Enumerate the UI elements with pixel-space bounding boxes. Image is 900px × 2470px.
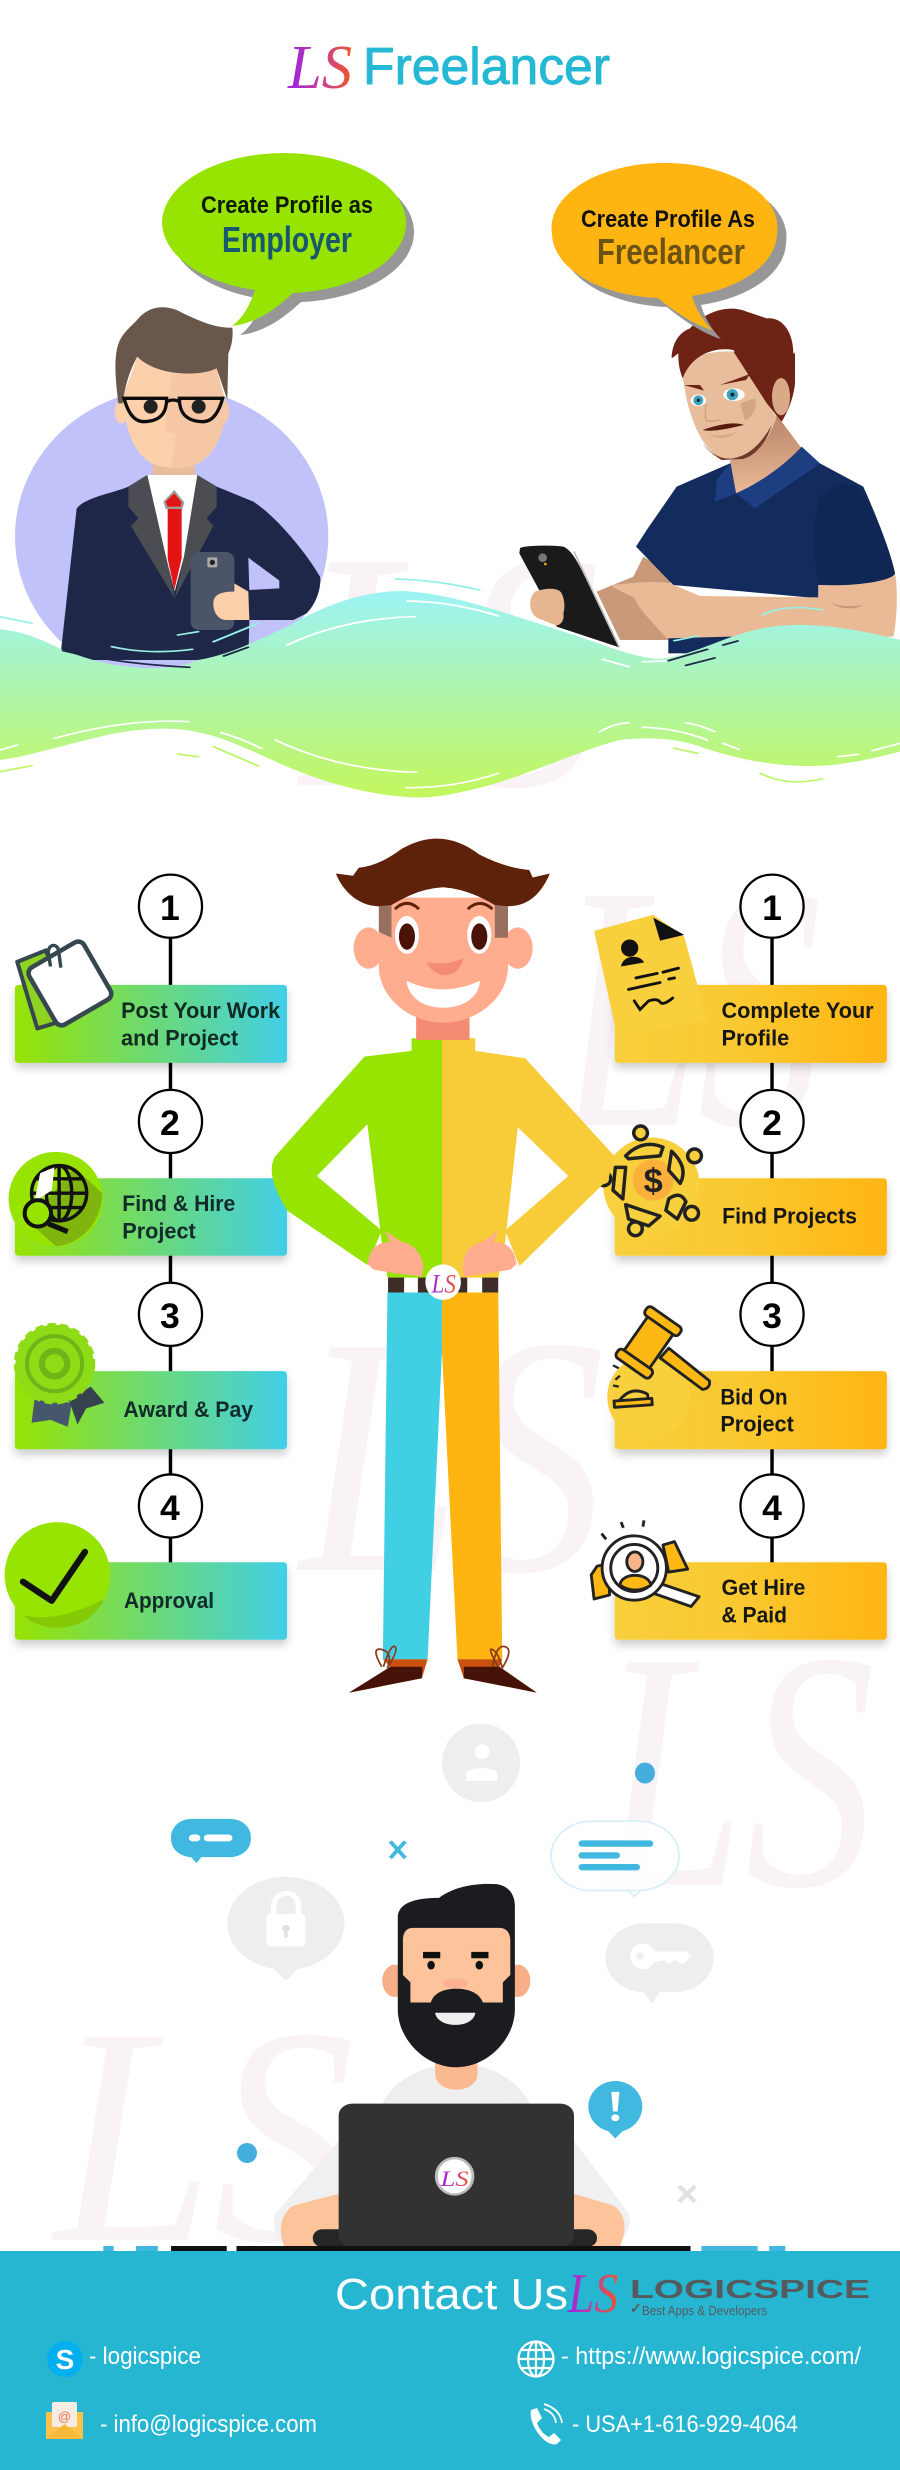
panel: employer step 1: and Project [121,1026,238,1051]
watermark: LS behind wave: LS [296,482,600,859]
speech bubble: employer: Employer [222,219,352,260]
speech bubble: freelancer: Create Profile As [581,206,755,233]
speech bubble: employer: Create Profile as [201,192,373,219]
panel: freelancer step 4: Get Hire [722,1575,805,1600]
panel: employer step 3: 3 [160,1296,180,1336]
wave divider [0,579,900,797]
panel: freelancer step 3: Project [720,1411,794,1436]
panel: freelancer step 1: 1 [762,888,782,928]
panel: freelancer step 4 [591,1474,887,1640]
timeline: employer steps line [169,906,172,1563]
speech bubble: employer [162,153,414,335]
icon: blue dot [635,1762,655,1784]
icon: phone [531,2404,562,2444]
panel: freelancer step 3: Bid On [720,1384,788,1409]
panel: contact footer [0,2251,900,2470]
panel: freelancer step 3: 3 [762,1296,782,1336]
contact: website: - https://www.logicspice.com/ [561,2343,861,2370]
panel: employer step 4: 4 [160,1488,180,1528]
title: LS Freelancer logo: Freelancer [363,38,610,96]
panel: employer step 4 [5,1474,287,1640]
illustration: freelancer man with tablet [519,309,897,653]
logo: Logicspice wordmark: LOGICSPICE [630,2274,870,2304]
illustration: bearded man at laptop [274,1884,630,2247]
speech bubble: freelancer: Freelancer [597,231,745,272]
icon: blue cross [390,1841,405,1858]
title: LS Freelancer logo: LS [287,34,352,102]
logo: Logicspice wordmark: ✓ [630,2300,642,2316]
panel: employer step 2 [9,1090,287,1256]
panel: employer step 1 [15,875,287,1063]
icon: skype: S [56,2344,74,2375]
timeline: freelancer steps line [770,906,774,1563]
logo: Logicspice wordmark [630,2274,870,2318]
desk line segments [103,2246,785,2252]
icon: skype [47,2341,83,2377]
icon: grey lock bubble [227,1877,344,1981]
panel: freelancer step 2: $ [644,1163,663,1201]
icon: mail envelope: @ [58,2409,71,2424]
icon: globe [518,2342,554,2376]
logo: LS mark: LS [567,2263,618,2325]
icon: blue chat bubble [171,1819,251,1863]
illustration: central standing character [272,839,614,1693]
panel: freelancer step 2 [597,1090,887,1256]
watermark: LS lower left: LS [51,1965,355,2308]
panel: freelancer step 1: Complete Your [722,998,874,1023]
speech bubble: freelancer [552,163,786,339]
icon: grey cross [679,2186,695,2202]
illustration: employer businessman [15,307,328,685]
panel: employer step 2: 2 [160,1103,180,1143]
heading: Contact Us: Contact Us [335,2270,568,2319]
contact: skype name: - logicspice [89,2343,201,2370]
icon: blue alert bubble [588,2081,642,2138]
icon: mail envelope [46,2402,83,2439]
contact: phone number: - USA+1-616-929-4064 [572,2411,798,2438]
icon: outlined message bubble [551,1821,679,1896]
panel: freelancer step 1 [594,875,887,1063]
icon: blue dot lower [237,2143,257,2163]
panel: freelancer step 4: 4 [762,1488,782,1528]
panel: freelancer step 4: & Paid [722,1603,787,1628]
panel: employer step 4: Approval [124,1588,214,1613]
panel: employer step 3 [15,1283,287,1449]
panel: freelancer step 3 [607,1283,887,1449]
panel: freelancer step 2: Find Projects [722,1204,857,1229]
panel: employer step 3: Award & Pay [123,1397,253,1422]
illustration: bearded man at laptop: LS [440,2167,469,2192]
contact: email: - info@logicspice.com [100,2411,317,2438]
watermark: LS centre: LS [295,1267,605,1644]
logo: Logicspice wordmark: Best Apps & Developers [642,2303,767,2318]
icon: grey key bubble [606,1923,713,2003]
illustration: central standing character: LS [431,1268,456,1298]
panel: freelancer step 2: 2 [762,1103,782,1143]
panel: employer step 1: Post Your Work [121,998,281,1023]
panel: freelancer step 1: Profile [722,1026,789,1051]
panel: employer step 1: 1 [160,888,180,928]
panel: employer step 2: Find & Hire [122,1191,235,1216]
icon: grey person bubble [442,1724,520,1802]
panel: employer step 2: Project [122,1219,196,1244]
title: LS Freelancer logo [287,34,610,102]
